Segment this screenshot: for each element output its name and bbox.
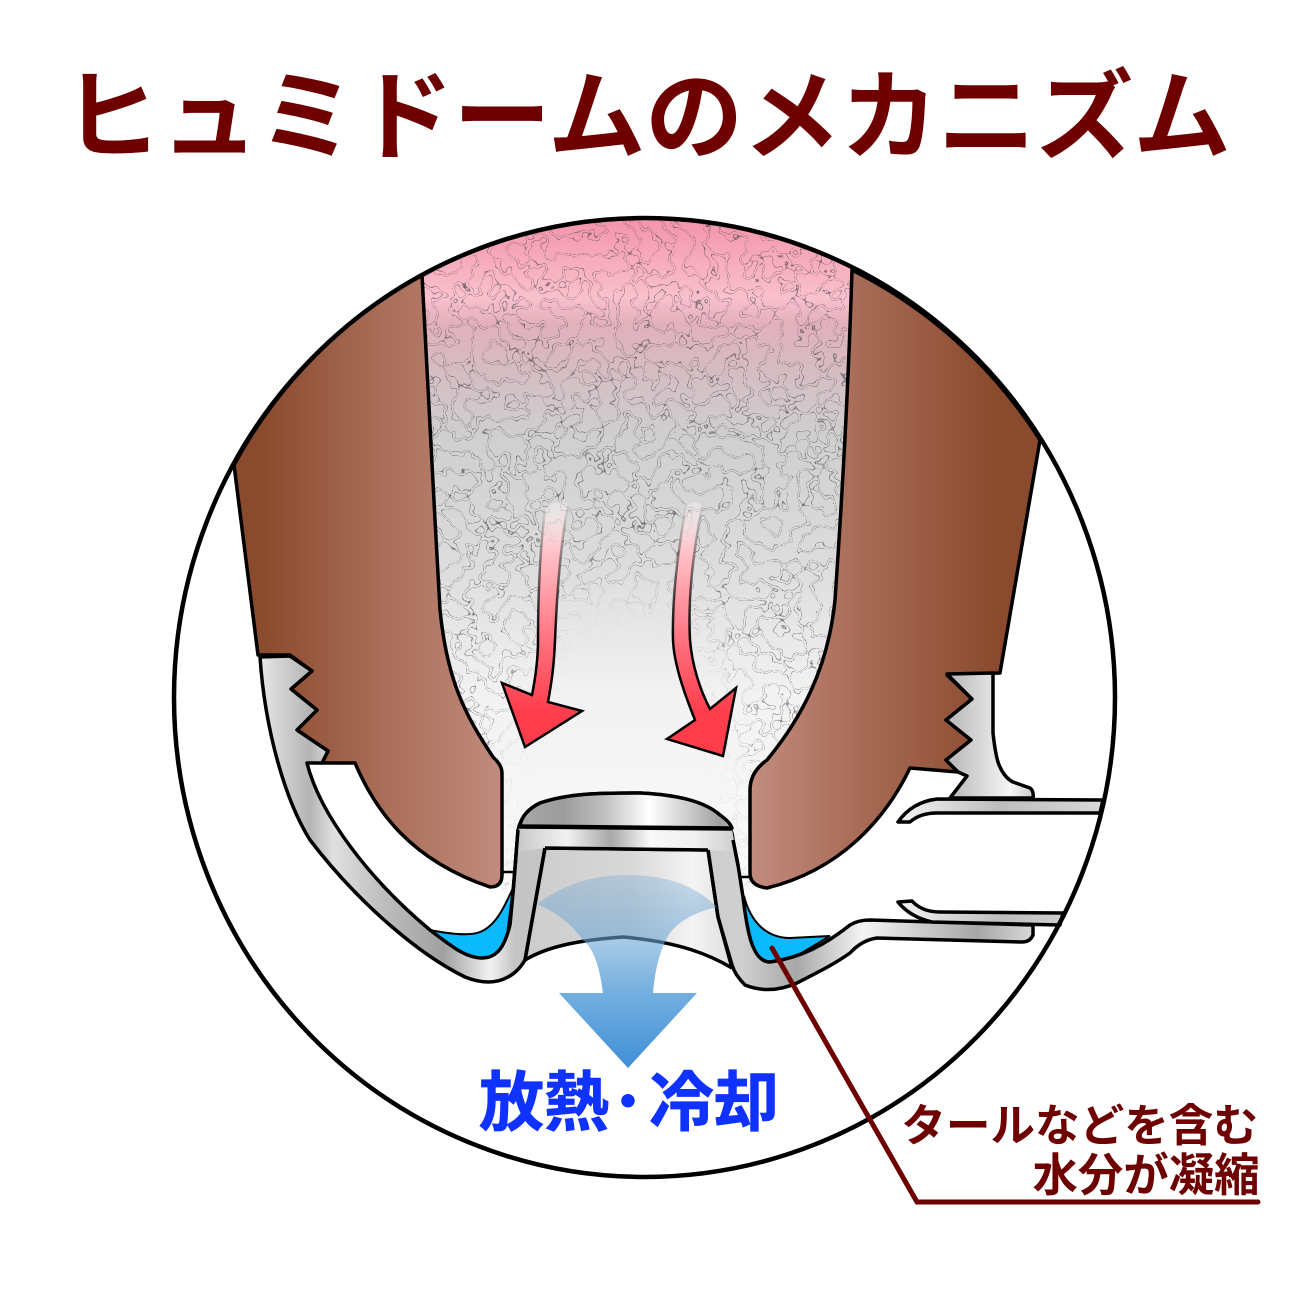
- water: left condensate: [430, 888, 513, 958]
- red arrow right: [667, 502, 736, 756]
- callout: condensation of moisture containing tar: 水分が凝縮: [1033, 1150, 1260, 1201]
- cup underside curve: [525, 937, 732, 968]
- cooling arrow: [537, 875, 717, 1068]
- red arrow left: [502, 502, 582, 747]
- diagram: cross-section in circle: [174, 215, 1115, 1177]
- upper right pipe: [898, 799, 1103, 822]
- title: ヒュミドームのメカニズム: [63, 62, 1231, 172]
- label: heat dissipation and cooling: 冷却: [649, 1066, 779, 1139]
- leader line: [772, 948, 1258, 1202]
- label: heat dissipation and cooling: 放熱: [479, 1066, 609, 1139]
- cup interior: [525, 848, 732, 968]
- metal dome body: [260, 656, 1033, 990]
- dome rim band: [516, 827, 736, 852]
- right brown clay wall: [750, 270, 1040, 888]
- left brown clay wall: [234, 275, 502, 887]
- magnifier circle outline: [174, 218, 1115, 1177]
- smoke chamber with texture: [410, 215, 860, 895]
- label: heat dissipation and cooling: ･: [612, 1066, 644, 1139]
- label: heat dissipation and cooling: [479, 1066, 779, 1139]
- callout: condensation of moisture containing tar: [901, 1102, 1260, 1201]
- small gap lines: [503, 872, 750, 877]
- callout: condensation of moisture containing tar: タールなどを含む: [901, 1102, 1258, 1151]
- lower right pipe: [898, 901, 1063, 925]
- water: right condensate: [744, 896, 830, 962]
- right thread fitting: [946, 673, 1033, 798]
- dome cap highlight: [520, 793, 732, 828]
